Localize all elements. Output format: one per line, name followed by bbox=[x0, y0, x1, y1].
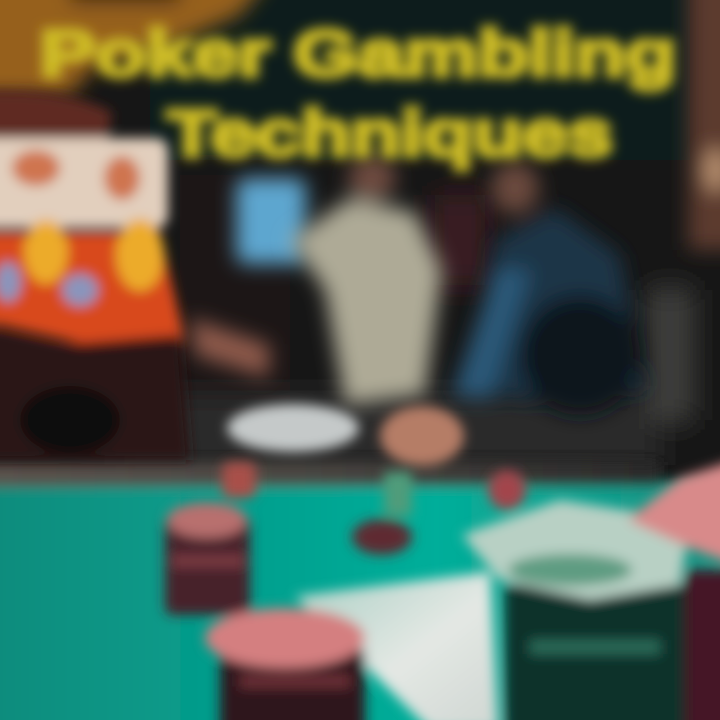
table felt bbox=[0, 482, 720, 720]
blue player arm bbox=[452, 270, 530, 400]
mascot gems bbox=[0, 262, 98, 306]
mascot gold trim bbox=[24, 219, 164, 291]
red stack body bbox=[685, 570, 720, 720]
chip stack left top bbox=[167, 502, 247, 538]
mascot robe bbox=[0, 232, 185, 350]
playing card bbox=[295, 572, 498, 720]
blue player head bbox=[491, 162, 539, 214]
chip stack front bbox=[205, 608, 365, 720]
title bbox=[40, 16, 676, 170]
white player head bbox=[348, 156, 396, 200]
table edge bbox=[0, 462, 660, 486]
blue player torso shadow bbox=[520, 295, 640, 415]
mascot king bbox=[0, 91, 190, 460]
mascot cheeks bbox=[12, 150, 140, 200]
white player arm bbox=[190, 318, 270, 378]
white player body bbox=[290, 198, 442, 405]
green stack stripe bbox=[508, 554, 632, 586]
title line 2: Techniques bbox=[167, 96, 613, 170]
mascot face bbox=[0, 138, 168, 228]
white sleeve on table bbox=[227, 404, 359, 452]
chip between fingers bbox=[384, 472, 412, 516]
mascot base bbox=[0, 325, 190, 460]
poker chips bbox=[165, 455, 720, 720]
poker table bbox=[0, 462, 720, 720]
chip stack left bbox=[165, 502, 250, 615]
chip stack left body bbox=[165, 515, 250, 615]
monitor screen bbox=[236, 178, 306, 264]
red stack top bbox=[628, 455, 720, 570]
player in blue bbox=[452, 162, 645, 415]
green stack top bbox=[462, 500, 690, 600]
green chip stack bbox=[462, 500, 690, 720]
falling chip small bbox=[222, 462, 256, 498]
right wall strip bbox=[688, 0, 720, 250]
chip stack front top bbox=[205, 608, 365, 668]
blue player body bbox=[470, 208, 645, 400]
player in white bbox=[190, 156, 442, 405]
mascot hat band bbox=[0, 91, 112, 138]
title line 1: Poker Gambling bbox=[40, 16, 676, 90]
player hand bbox=[380, 406, 464, 466]
green stack body bbox=[505, 585, 690, 720]
crown decoration bbox=[0, 0, 275, 95]
single chip center bbox=[352, 519, 412, 555]
red chip stack right bbox=[628, 455, 720, 720]
red chip back bbox=[488, 470, 526, 510]
background: dark casino room bbox=[0, 0, 720, 500]
chip stack front body bbox=[220, 650, 365, 720]
